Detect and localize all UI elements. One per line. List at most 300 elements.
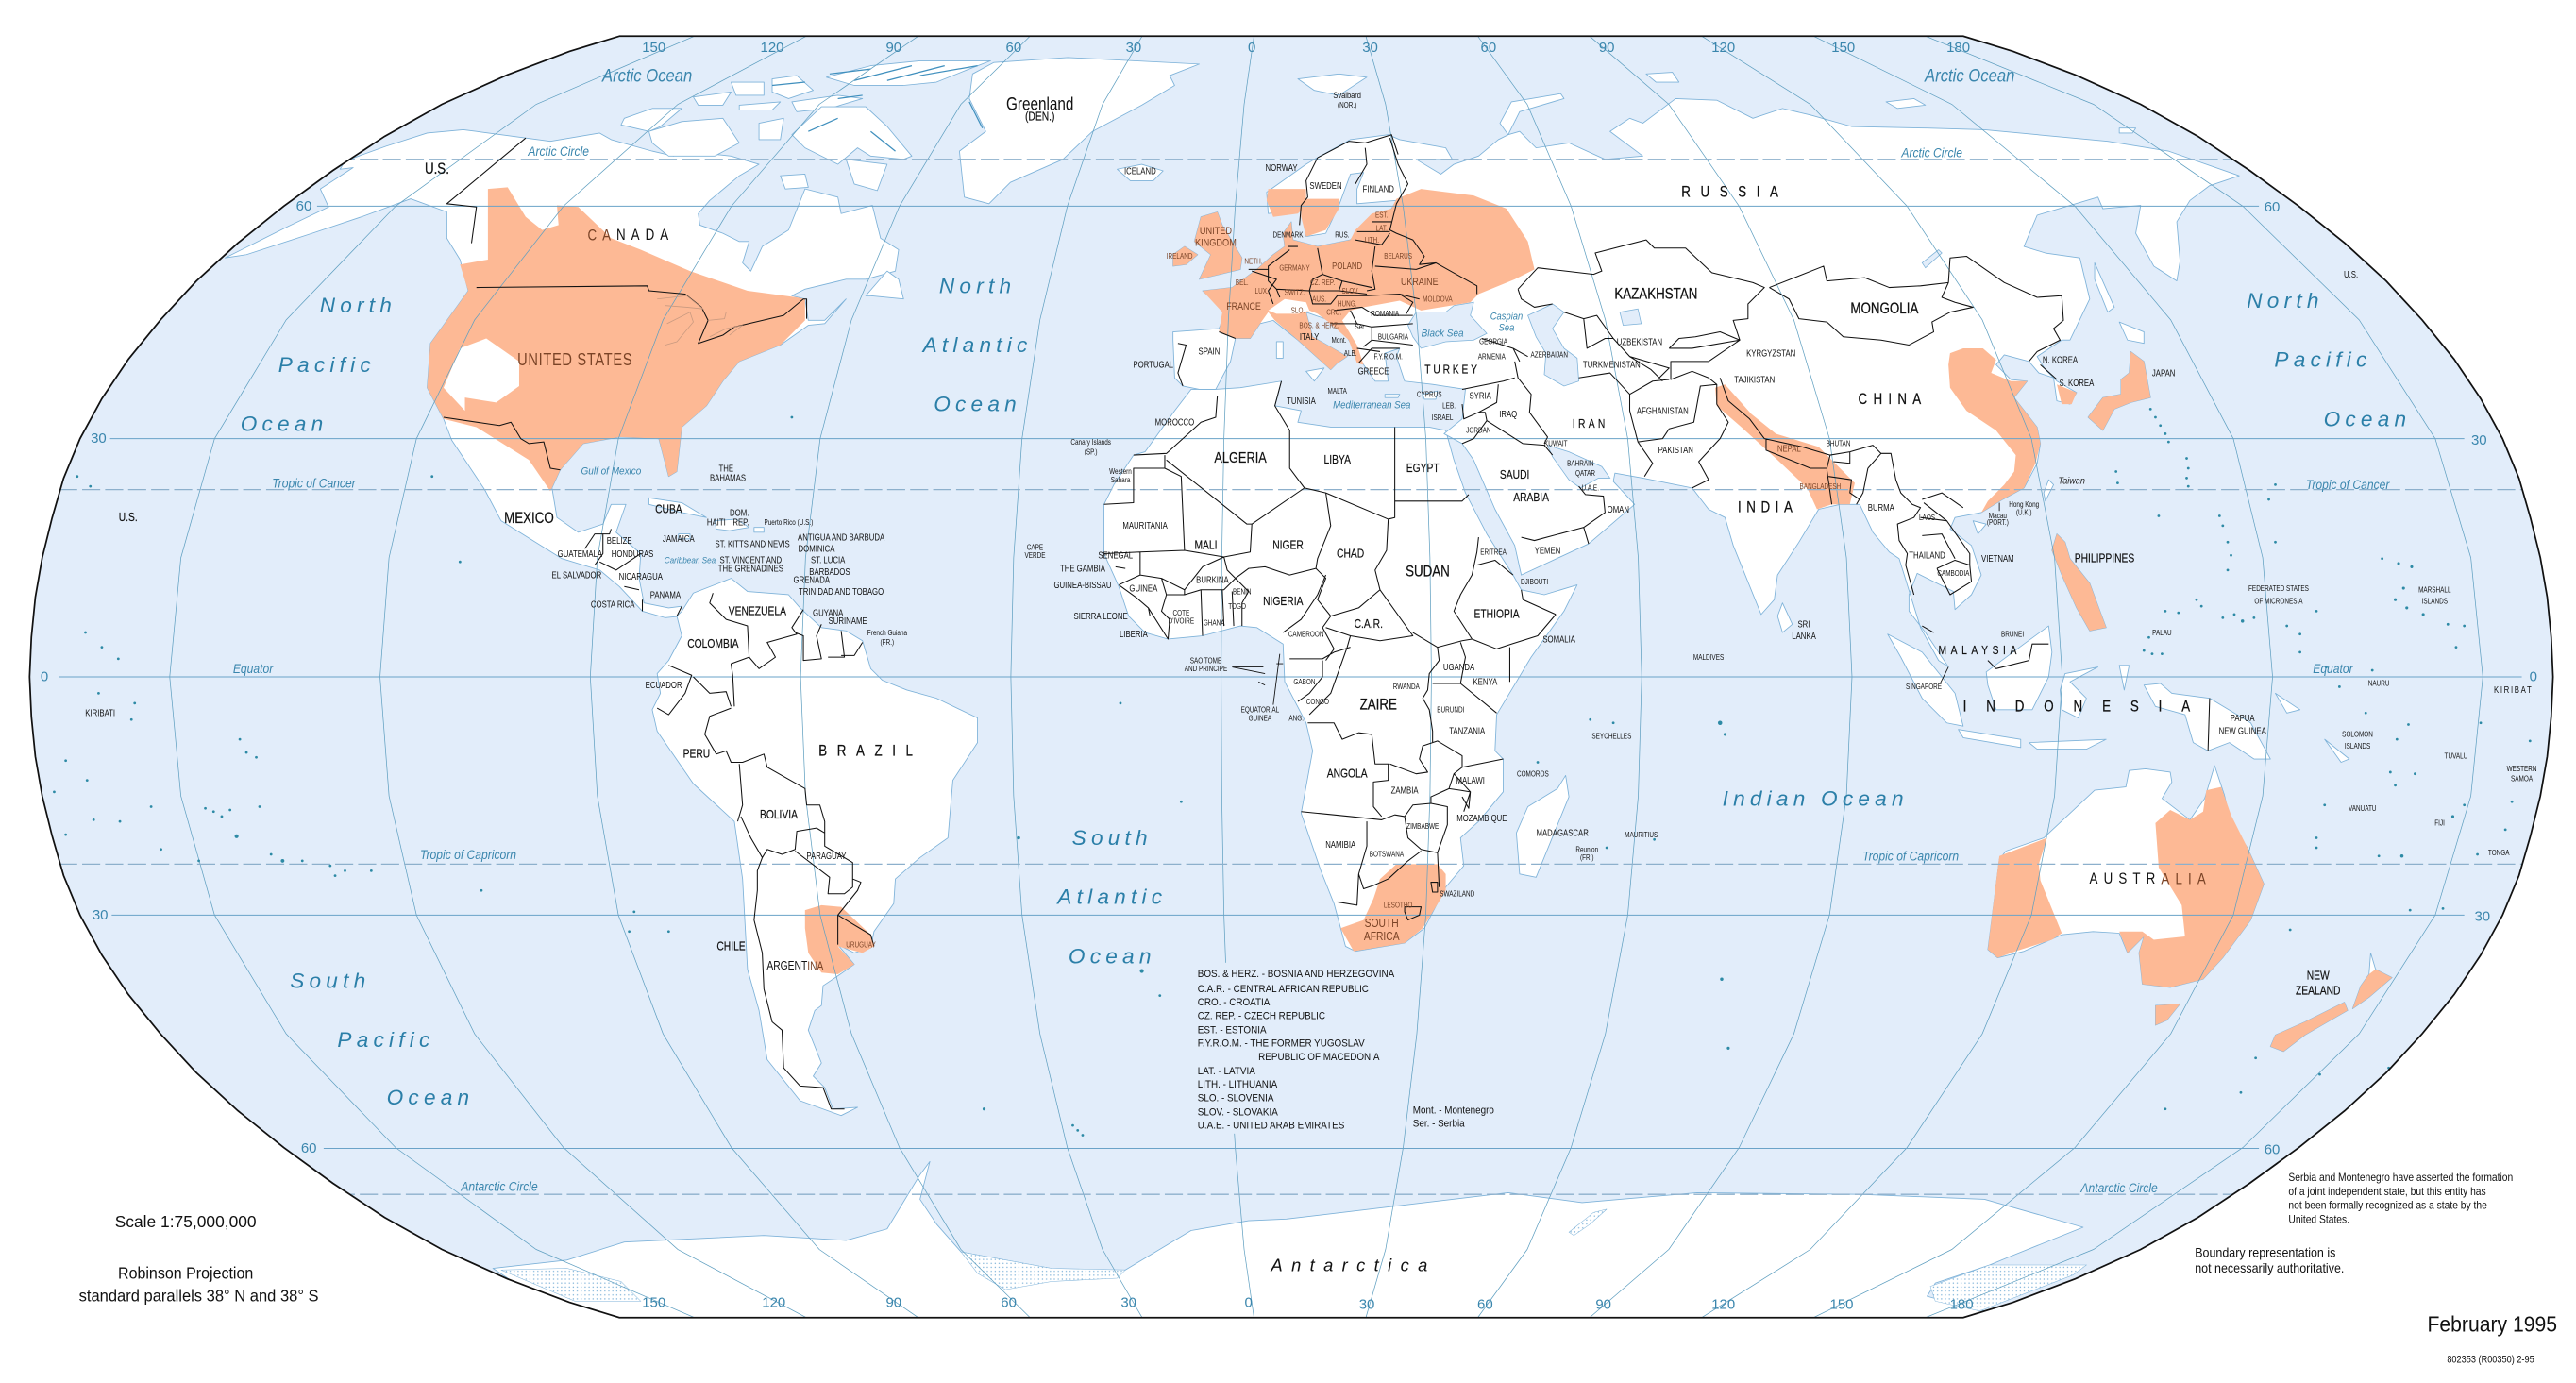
graticule degree labels: 0 [1248, 40, 1255, 56]
country labels: Americas: KIRIBATI [85, 708, 115, 718]
country labels: Americas: THE [718, 463, 733, 474]
country labels: Americas: ARGENTINA [766, 959, 824, 972]
country labels: Africa: D'IVOIRE [1169, 616, 1194, 626]
country labels: Africa: MALI [1194, 539, 1218, 552]
graticule degree labels: 60 [1477, 1296, 1493, 1312]
country labels: Americas: CANADA [588, 226, 674, 244]
country labels: Europe: FINLAND [1363, 184, 1394, 194]
country labels: Americas: ST. LUCIA [811, 555, 845, 565]
country labels: Americas: JAMAICA [663, 533, 695, 544]
country labels: Asia and Pacific: VIETNAM [1981, 553, 2014, 564]
country labels: Africa: NIGER [1272, 539, 1304, 552]
country labels: Europe: SPAIN [1199, 346, 1220, 357]
Serbia and Montenegro note: not been formally recognized as a state by the [2288, 1200, 2487, 1212]
South America [652, 579, 978, 1116]
country labels: Africa: MOROCCO [1155, 417, 1194, 428]
ocean and water labels: Tropic of Cancer [272, 476, 356, 491]
inland seas [1408, 250, 1942, 488]
scale and projection note [79, 1212, 319, 1306]
country labels: Africa: Reunion [1575, 845, 1598, 854]
ocean and water labels: Sea [1499, 323, 1515, 334]
shaded region: Sweden [1301, 199, 1339, 237]
ocean and water labels: Ocean [934, 393, 1021, 416]
country labels: Europe: DENMARK [1273, 230, 1304, 240]
boundary disclaimer: not necessarily authoritative. [2195, 1261, 2344, 1275]
country labels: Europe: LAT. [1376, 224, 1388, 233]
country labels: Asia and Pacific: CHINA [1859, 391, 1927, 408]
Serbia and Montenegro note: United States. [2288, 1214, 2349, 1226]
country labels: Americas: MEXICO [504, 510, 554, 527]
ocean and water labels: Antarctica [1271, 1256, 1437, 1275]
arctic islands [621, 60, 1163, 539]
abbreviations legend: SLO. - SLOVENIA [1198, 1092, 1274, 1105]
country labels: Americas: THE GRENADINES [718, 564, 783, 574]
country labels: Asia and Pacific: CYPRUS [1417, 390, 1442, 399]
abbreviations legend: EST. - ESTONIA [1198, 1024, 1267, 1037]
country labels: Africa: SIERRA LEONE [1074, 611, 1128, 621]
country labels: Europe: LUX. [1255, 286, 1269, 295]
country labels: Africa: BURKINA [1196, 575, 1229, 585]
country labels: Asia and Pacific: ISLANDS [2422, 597, 2448, 606]
ocean and water labels: Caribbean Sea [665, 555, 716, 565]
country labels: Africa: EQUATORIAL [1241, 705, 1279, 715]
country labels: Asia and Pacific: YEMEN [1535, 545, 1560, 556]
graticule degree labels: 30 [1359, 1296, 1374, 1312]
shaded region: North America [428, 187, 805, 491]
country labels: Asia and Pacific: BHUTAN [1827, 439, 1850, 448]
ocean and water labels: North [2247, 289, 2324, 312]
country labels: Asia and Pacific: ZEALAND [2296, 984, 2341, 998]
graticule degree labels: 60 [2265, 199, 2280, 215]
shaded regions [428, 187, 2392, 1052]
country labels: Asia and Pacific: TONGA [2488, 848, 2510, 857]
country labels: Africa: AND PRINCIPE [1185, 664, 1227, 673]
country labels: Africa: C.A.R. [1355, 617, 1383, 631]
country labels: Europe: NETH. [1244, 257, 1263, 266]
country labels: Asia and Pacific [1417, 183, 2537, 998]
country labels: Africa: SUDAN [1406, 563, 1450, 581]
graticule degree labels: 120 [762, 1295, 785, 1311]
graticule degree labels: 0 [1245, 1295, 1253, 1311]
country labels: Africa: (FR.) [1580, 852, 1594, 862]
country labels: Europe: UNITED [1200, 226, 1232, 237]
country labels: Africa: LIBERIA [1120, 629, 1148, 639]
country labels: Asia and Pacific: AZERBAIJAN [1531, 350, 1568, 360]
ocean and water labels: Pacific [2274, 348, 2372, 372]
ocean and water labels: Black Sea [1422, 328, 1464, 340]
graticule degree labels: 30 [1120, 1295, 1136, 1311]
country labels: Europe: SWEDEN [1309, 180, 1342, 191]
country labels: Asia and Pacific: INDIA [1738, 498, 1797, 516]
African borders [1104, 381, 1556, 920]
country labels: Europe: LITH. [1364, 235, 1379, 245]
country labels: Asia and Pacific: TURKMENISTAN [1583, 360, 1641, 370]
shaded region: Tasmania [2155, 1004, 2180, 1025]
country labels: Africa: MADAGASCAR [1536, 828, 1589, 838]
abbreviations legend: LAT. - LATVIA [1198, 1065, 1256, 1077]
ocean and water labels: Ocean [1069, 944, 1156, 968]
Africa [1104, 381, 1577, 952]
country labels: Americas: U.S. [119, 511, 138, 524]
graticule degree labels: 180 [1950, 1296, 1974, 1312]
country labels: Europe: Svalbard [1333, 90, 1361, 100]
ocean and water labels: Ocean [387, 1086, 474, 1109]
country labels: Asia and Pacific: BANGLADESH [1800, 481, 1841, 491]
country labels: Americas: REP. [732, 517, 749, 528]
small islands [53, 408, 2532, 1137]
country labels: Asia and Pacific: NEW GUINEA [2219, 726, 2266, 736]
country labels: Asia and Pacific: SAMOA [2511, 774, 2533, 784]
country labels: Americas: Greenland [1006, 93, 1073, 114]
country labels: Americas: NICARAGUA [619, 571, 663, 582]
country labels: Europe: F.Y.R.O.M. [1373, 352, 1403, 362]
country labels: Europe: BEL. [1236, 278, 1249, 287]
country labels: Europe: Mont. [1331, 335, 1346, 345]
country labels: Africa: CHAD [1337, 547, 1364, 561]
country labels: Africa: ALGERIA [1214, 450, 1267, 466]
country labels: Africa: Sahara [1111, 475, 1131, 484]
country labels: Americas: U.S. [425, 160, 449, 178]
country labels: Africa: ZAMBIA [1391, 785, 1419, 796]
country labels: Asia and Pacific: (U.K.) [2016, 508, 2032, 517]
ocean and water labels: Antarctic Circle [460, 1179, 538, 1194]
country labels: Africa [1024, 396, 1724, 943]
graticule degree labels: 30 [1362, 40, 1378, 56]
graticule degree labels: 60 [2265, 1142, 2280, 1158]
ocean and water labels: Tropic of Capricorn [1862, 849, 1959, 864]
country labels: Europe: RUS. [1335, 230, 1350, 240]
shaded region: Himalaya and Ganges [1715, 384, 1855, 509]
country labels: Asia and Pacific: SYRIA [1469, 391, 1491, 401]
country labels: Americas: French Guiana [867, 628, 908, 637]
country labels: Asia and Pacific: NEPAL [1777, 444, 1801, 454]
country labels: Asia and Pacific: Macau [1989, 511, 2007, 520]
scale and projection note: standard parallels 38° N and 38° S [79, 1287, 319, 1306]
ocean and water labels: South [290, 969, 370, 992]
country labels: Africa: BOTSWANA [1370, 850, 1404, 859]
graticule degree labels: 60 [1001, 1295, 1017, 1311]
country labels: Asia and Pacific: MARSHALL [2418, 585, 2451, 595]
country labels: Africa: MOZAMBIQUE [1456, 813, 1507, 823]
country labels: Europe: BULGARIA [1378, 332, 1408, 342]
country labels: Asia and Pacific: AUSTRALIA [2090, 870, 2212, 887]
country labels: Africa: GUINEA-BISSAU [1053, 580, 1111, 590]
country labels: Africa: NAMIBIA [1325, 839, 1355, 850]
country labels: Asia and Pacific: QATAR [1575, 468, 1595, 478]
abbreviations legend: REPUBLIC OF MACEDONIA [1258, 1051, 1380, 1063]
shaded region: New Zealand [2270, 970, 2392, 1052]
shaded region: western Australia [1988, 838, 2062, 958]
country labels: Europe: SLO. [1291, 306, 1305, 315]
country labels: Africa: RWANDA [1393, 682, 1420, 691]
scale and projection note: Scale 1:75,000,000 [115, 1212, 257, 1231]
country labels: Africa: ETHIOPIA [1474, 608, 1520, 621]
country labels: Americas: PERU [683, 748, 710, 761]
country labels: Europe: PORTUGAL [1133, 360, 1173, 370]
country labels: Europe: CZ. REP. [1310, 278, 1335, 287]
country labels: Africa: DJIBOUTI [1521, 577, 1548, 586]
country labels: Europe: EST. [1375, 211, 1388, 220]
country labels: Asia and Pacific: KYRGYZSTAN [1746, 348, 1795, 359]
country labels: Americas: PARAGUAY [806, 851, 847, 861]
ocean and water labels: Atlantic [1055, 885, 1167, 909]
country labels: Asia and Pacific: U.A.E. [1582, 483, 1599, 493]
country labels: Americas: (FR.) [881, 637, 894, 647]
country labels: Africa: ANGOLA [1327, 767, 1368, 781]
shaded region: South Africa [1340, 864, 1446, 952]
country labels: Africa: SWAZILAND [1440, 889, 1474, 899]
country labels: Asia and Pacific: LANKA [1792, 631, 1816, 641]
country labels: Africa: VERDE [1024, 550, 1046, 560]
graticule degree labels: 30 [93, 907, 108, 923]
ocean and water labels: Mediterranean Sea [1333, 400, 1411, 412]
graticule degree labels: 90 [885, 40, 901, 56]
country labels: Americas: ST. KITTS AND NEVIS [716, 539, 790, 549]
ocean and water labels: Arctic Ocean [1924, 65, 2014, 86]
ocean and water labels: Ocean [2324, 407, 2411, 430]
graticule degree labels: 150 [1831, 40, 1855, 56]
country labels: Europe [1133, 90, 1453, 396]
country labels: Africa: ZIMBABWE [1406, 821, 1439, 831]
shaded region: Philippines [2052, 534, 2106, 631]
Serbia and Montenegro note [2288, 1172, 2513, 1226]
islands of Europe, Asia and Oceania [1173, 73, 2392, 1052]
ocean and water labels: Equator [2313, 661, 2353, 676]
country labels: Africa: SEYCHELLES [1591, 732, 1631, 741]
country labels: Europe: ALB. [1344, 348, 1357, 358]
country labels: Europe: SLOV. [1342, 286, 1359, 295]
ocean and water labels [233, 65, 2411, 1275]
country labels: Americas: Puerto Rico (U.S.) [764, 517, 813, 527]
country labels: Europe: GREECE [1358, 366, 1389, 377]
boundary disclaimer [2195, 1245, 2344, 1275]
country labels: Europe: FRANCE [1226, 301, 1261, 313]
graticule degree labels: 30 [2471, 432, 2487, 448]
shaded region: Great Britain [1194, 212, 1242, 279]
country labels: Asia and Pacific: SAUDI [1500, 468, 1529, 481]
country labels: Africa: NIGERIA [1263, 595, 1304, 608]
country labels: Asia and Pacific: ARMENIA [1478, 352, 1506, 362]
shaded region: Korea [2057, 384, 2077, 404]
country labels: Asia and Pacific: VANUATU [2349, 803, 2377, 813]
country labels: Asia and Pacific: IRAQ [1499, 409, 1517, 419]
country labels: Americas: BOLIVIA [760, 808, 798, 821]
country labels: Africa: TANZANIA [1449, 726, 1485, 736]
ocean and water labels: Caspian [1490, 312, 1524, 323]
country labels: Asia and Pacific: JAPAN [2152, 368, 2175, 379]
country labels: Africa: GUINEA [1249, 714, 1271, 722]
country labels: Asia and Pacific: PALAU [2152, 628, 2172, 637]
country labels: Europe: IRELAND [1167, 252, 1192, 261]
country labels: Americas: BELIZE [607, 535, 632, 546]
country labels: Europe: (NOR.) [1338, 100, 1356, 110]
country labels: Europe: ROMANIA [1371, 309, 1399, 318]
shaded region: eastern Australia [2119, 787, 2264, 987]
country labels: Africa: SOMALIA [1542, 633, 1575, 645]
abbreviations legend: U.A.E. - UNITED ARAB EMIRATES [1198, 1120, 1344, 1132]
Great Lakes outlines [657, 295, 743, 345]
graticule degree labels: 60 [1481, 40, 1496, 56]
ocean and water labels: Taiwan [2058, 476, 2085, 487]
country borders [444, 135, 2210, 1109]
country labels: Americas: GUYANA [813, 608, 843, 618]
country labels: Africa: MALDIVES [1693, 652, 1724, 662]
country labels: Asia and Pacific: ISLANDS [2345, 741, 2370, 751]
graticule degree labels: 150 [642, 40, 665, 56]
country labels: Asia and Pacific: MONGOLIA [1850, 300, 1919, 318]
country labels: Asia and Pacific: S. KOREA [2060, 378, 2094, 388]
scale and projection note: Robinson Projection [118, 1264, 253, 1283]
graticule degree labels: 60 [1006, 40, 1021, 56]
country labels: Americas: (DEN.) [1025, 110, 1055, 124]
country labels: Africa: (SP.) [1085, 447, 1098, 457]
country labels: Asia and Pacific: JORDAN [1466, 426, 1491, 435]
country labels: Africa: KENYA [1473, 677, 1497, 687]
abbreviations legend [1198, 969, 1494, 1132]
graticule degree labels: 120 [1711, 40, 1735, 56]
country labels: Africa: GUINEA [1129, 583, 1157, 594]
country labels: Americas: ICELAND [1124, 165, 1156, 177]
country labels: Americas: ST. VINCENT AND [720, 555, 782, 565]
abbreviations legend: SLOV. - SLOVAKIA [1198, 1106, 1279, 1119]
country labels: Europe: AUS. [1312, 295, 1326, 304]
country labels: Asia and Pacific: BRUNEI [2001, 630, 2024, 639]
ocean and water labels: Arctic Circle [527, 143, 589, 159]
country labels: Europe: CRO. [1326, 308, 1341, 317]
country labels: Asia and Pacific: NAURU [2368, 679, 2390, 688]
country labels: Asia and Pacific: ARABIA [1513, 491, 1549, 504]
graticule degree labels: 120 [761, 40, 783, 56]
country labels: Asia and Pacific: RUSSIA [1681, 183, 1788, 201]
arrows: Sao Tome and Equatorial Guinea pointers [1232, 654, 1283, 705]
country labels: Asia and Pacific: U.S. [2344, 269, 2358, 279]
shaded region: Argentina and Uruguay [805, 905, 874, 974]
graticule degree labels: 90 [885, 1295, 901, 1311]
country labels: Asia and Pacific: TAJIKISTAN [1734, 374, 1775, 385]
country labels: Asia and Pacific: LAOS [1919, 513, 1935, 522]
country labels: Asia and Pacific: SRI [1798, 619, 1810, 630]
Madagascar [1516, 775, 1569, 877]
ocean and water labels: South [1072, 826, 1153, 850]
country labels: Asia and Pacific: MALAYSIA [1938, 644, 2021, 657]
ocean and water labels: Atlantic [921, 333, 1033, 357]
country labels: Asia and Pacific: WESTERN [2507, 764, 2537, 773]
abbreviations legend: F.Y.R.O.M. - THE FORMER YUGOSLAV [1198, 1037, 1366, 1050]
country labels: Asia and Pacific: THAILAND [1909, 550, 1945, 561]
country labels: Americas: BARBADOS [809, 566, 850, 577]
country labels: Asia and Pacific: PHILIPPINES [2075, 552, 2134, 565]
country labels: Africa: TUNISIA [1287, 396, 1316, 406]
country labels: Africa: AFRICA [1364, 930, 1400, 943]
graticule degree labels: 30 [2474, 909, 2490, 925]
country labels: Europe: SWITZ. [1285, 288, 1305, 297]
ocean and water labels: Gulf of Mexico [581, 465, 641, 478]
graticule degree labels: 120 [1711, 1296, 1735, 1312]
country labels: Americas: CHILE [716, 939, 746, 953]
country labels: Americas: ANTIGUA AND BARBUDA [798, 532, 884, 543]
ocean and water labels: Tropic of Cancer [2306, 477, 2390, 492]
country labels: Africa: COTE [1173, 608, 1189, 617]
country labels: Americas: GRENADA [794, 575, 830, 585]
graticule degree labels: 180 [1946, 40, 1970, 56]
country labels: Asia and Pacific: OMAN [1608, 504, 1629, 514]
country labels: Americas: ECUADOR [646, 680, 682, 690]
graticule degree labels: 90 [1595, 1296, 1611, 1312]
country labels: Africa: BURUNDI [1437, 705, 1464, 715]
Serbia and Montenegro note: Serbia and Montenegro have asserted the formation [2288, 1172, 2513, 1184]
graticule degree labels: 150 [642, 1295, 665, 1311]
Antarctica [493, 1161, 2083, 1334]
boundary disclaimer: Boundary representation is [2195, 1245, 2336, 1260]
ocean and water labels: Tropic of Capricorn [420, 847, 516, 862]
country labels: Asia and Pacific: TURKEY [1424, 363, 1480, 377]
Greenland [959, 58, 1200, 204]
country labels: Asia and Pacific: KIRIBATI [2494, 684, 2536, 695]
Serbia and Montenegro note: of a joint independent state, but this entity has [2288, 1186, 2486, 1198]
arrows: Singapore and Macau pointers [1940, 503, 1999, 683]
graticule degree labels: 60 [301, 1140, 317, 1156]
country labels: Europe: MOLDOVA [1423, 295, 1453, 304]
ocean and water labels: North [939, 274, 1016, 297]
ocean and water labels: Pacific [278, 353, 376, 377]
arctic fjords [772, 65, 984, 152]
country labels: Asia and Pacific: N. KOREA [2043, 355, 2078, 365]
country labels: Asia and Pacific: FIJI [2434, 818, 2445, 828]
tropics and polar circles [59, 160, 2523, 1194]
country labels: Africa: LIBYA [1324, 453, 1351, 466]
abbreviations legend: Mont. - Montenegro [1413, 1105, 1494, 1117]
country labels: Asia and Pacific: FEDERATED STATES [2248, 583, 2309, 593]
country labels: Africa: MAURITANIA [1122, 520, 1168, 531]
North American borders [444, 138, 807, 616]
country labels: Africa: CAMEROON [1288, 630, 1323, 639]
ocean and water labels: Ocean [241, 413, 328, 436]
country labels: Americas: URUGUAY [846, 940, 876, 950]
graticule degree labels: 0 [2530, 669, 2537, 685]
country labels: Africa: CAPE [1027, 543, 1043, 551]
ocean and water labels: Antarctic Circle [2079, 1180, 2158, 1195]
country labels: Africa: MAURITIUS [1625, 830, 1658, 839]
country labels: Africa: GABON [1293, 677, 1315, 686]
country labels: Asia and Pacific: SOLOMON [2342, 730, 2373, 739]
date: February 1995 [2427, 1312, 2557, 1337]
country labels: Asia and Pacific: (PORT.) [1987, 517, 2009, 527]
country labels: Asia and Pacific: BURMA [1868, 502, 1894, 513]
country labels: Asia and Pacific: TUVALU [2445, 751, 2467, 761]
abbreviations legend: C.A.R. - CENTRAL AFRICAN REPUBLIC [1198, 983, 1369, 995]
country labels: Asia and Pacific: ISRAEL [1432, 413, 1453, 422]
country labels: Americas: COLOMBIA [687, 637, 739, 650]
country labels: Europe: MALTA [1328, 386, 1347, 396]
South American borders [657, 593, 874, 1109]
country labels: Europe: KINGDOM [1195, 237, 1237, 249]
abbreviations legend: BOS. & HERZ. - BOSNIA AND HERZEGOVINA [1198, 969, 1395, 980]
country labels: Europe: HUNG. [1338, 299, 1356, 309]
country labels: Africa: ANG. [1288, 714, 1304, 722]
country labels: Africa: ERITREA [1480, 548, 1507, 557]
country labels: Africa: CONGO [1306, 697, 1329, 706]
legend backing [1194, 963, 1403, 1134]
ocean and water labels: Equator [233, 661, 274, 676]
ocean and water labels: Arctic Circle [1900, 145, 1962, 160]
country labels: Africa: MALAWI [1456, 775, 1485, 785]
country labels: Asia and Pacific: OF MICRONESIA [2254, 597, 2303, 606]
graticule degree labels: 0 [41, 669, 48, 685]
Switzerland gap [1269, 299, 1309, 313]
shaded region: eastern China [1948, 348, 2041, 513]
graticule degree labels: 30 [91, 430, 107, 447]
country labels: Africa: COMOROS [1517, 769, 1549, 779]
